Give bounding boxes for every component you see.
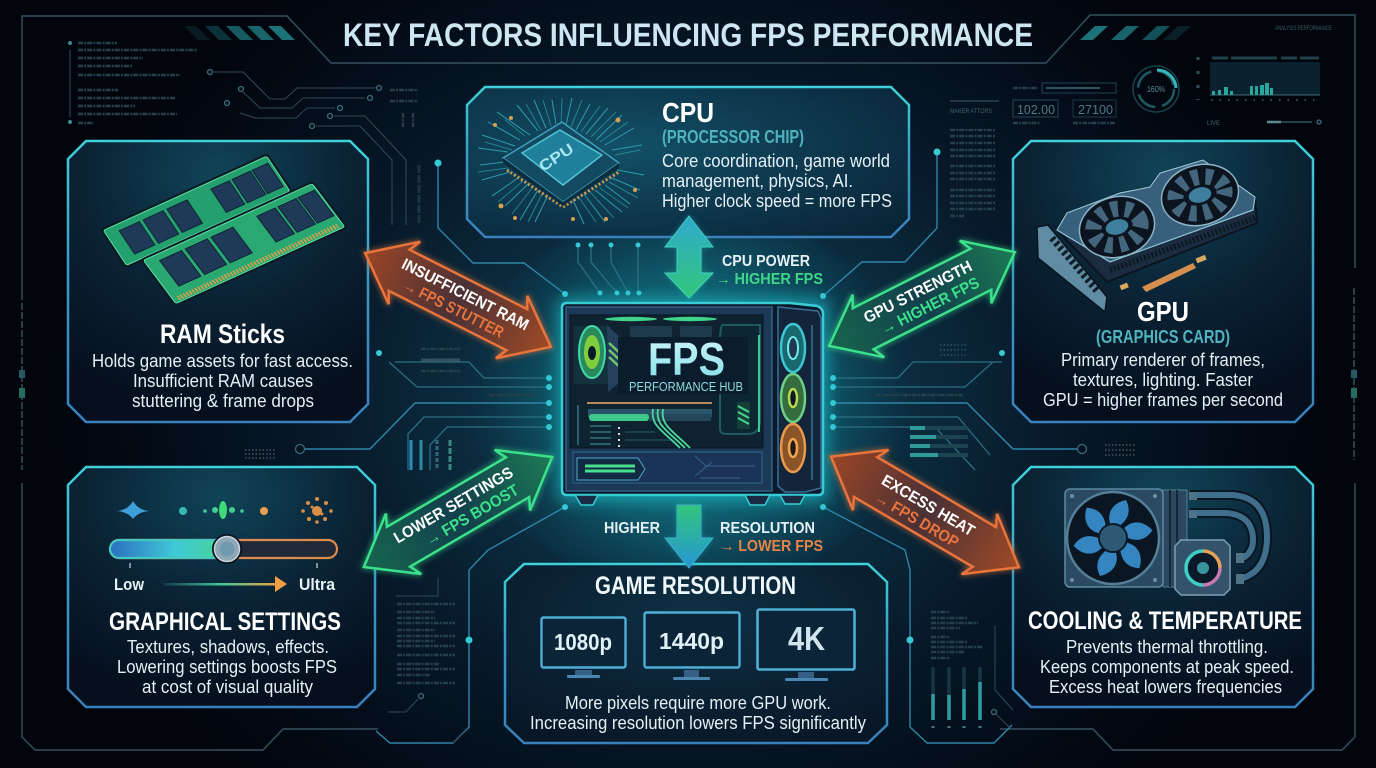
hub glow: [460, 210, 920, 590]
resolution description: More pixels require more GPU work.: [565, 693, 831, 713]
GPU description: textures, lighting. Faster: [1073, 370, 1253, 390]
arrow: GPU strength: [813, 221, 1031, 377]
cooling heading: COOLING & TEMPERATURE: [1028, 607, 1302, 635]
decorative stripes left: [184, 26, 295, 40]
monitor 1080p: [542, 618, 626, 678]
icon: CPU chip: [478, 98, 644, 224]
icon: low detail lens: [117, 501, 149, 519]
hub label backing: [618, 337, 748, 394]
GPU description: [1043, 350, 1283, 410]
panel: GPU: [1013, 141, 1313, 422]
arrow: lower settings: → FPS BOOST: [423, 482, 522, 550]
label: CPU power: CPU POWER: [722, 253, 810, 270]
data table right of CPU: [950, 101, 999, 216]
panel: cooling: [1013, 467, 1313, 707]
RAM description: Insufficient RAM causes: [133, 371, 313, 391]
arrow: lower settings: LOWER SETTINGS: [391, 464, 517, 547]
readouts top right: 102.00: [1017, 103, 1055, 117]
cooling description: [1040, 637, 1294, 697]
case feet: [575, 495, 805, 505]
CPU description: Higher clock speed = more FPS: [662, 191, 892, 211]
resolution description: [530, 693, 866, 733]
arrow: GPU strength: → HIGHER FPS: [878, 274, 983, 339]
central hub: PC case: [558, 298, 828, 505]
resolution heading: GAME RESOLUTION: [595, 572, 796, 600]
data table right of CPU: MAKER ATTORS: [950, 108, 992, 115]
data readout top left: [68, 41, 197, 124]
monitor 4K: 4K: [788, 620, 825, 657]
CPU description: Core coordination, game world: [662, 151, 890, 171]
gauge: [1133, 66, 1179, 112]
arrow: CPU to hub: [665, 216, 713, 298]
monitor 1440p: [644, 612, 740, 680]
top right caption: ANALYSIS PERFORMANCE: [1275, 26, 1332, 32]
icon: graphics card: [1037, 156, 1257, 312]
monitor 1080p: 1080p: [554, 629, 612, 655]
arrow: insufficient RAM: [349, 222, 567, 378]
label: higher resolution: → LOWER FPS: [720, 538, 823, 555]
icon: detail dots: [179, 501, 268, 519]
CPU cooler block: [607, 325, 760, 434]
monitor 4K: [758, 610, 854, 681]
icon: ultra particles: [301, 497, 333, 524]
RAM description: [92, 351, 353, 411]
arrow: GPU strength: GPU STRENGTH: [861, 258, 975, 327]
icon: RAM sticks: [102, 155, 346, 305]
graphical settings description: Textures, shadows, effects.: [127, 637, 329, 657]
circuit traces top left: [208, 70, 419, 225]
arrow: insufficient RAM: → FPS STUTTER: [400, 277, 507, 342]
PSU shroud: [573, 452, 762, 483]
quality slider: [110, 534, 337, 568]
graphical settings heading: GRAPHICAL SETTINGS: [109, 608, 341, 636]
label: higher resolution: [604, 520, 823, 555]
panel: RAM: [68, 141, 368, 422]
performance hub label: PERFORMANCE HUB: [629, 380, 743, 394]
GPU heading: GPU: [1137, 296, 1189, 327]
label: higher resolution: HIGHER: [604, 520, 660, 537]
motherboard: [578, 403, 712, 448]
GPU description: Primary renderer of frames,: [1061, 350, 1265, 370]
RGB top strips: [605, 317, 717, 321]
readouts top right: 27100: [1078, 103, 1113, 117]
cooling description: Excess heat lowers frequencies: [1049, 677, 1282, 697]
cooling description: Prevents thermal throttling.: [1066, 637, 1268, 657]
cooling description: Keeps components at peak speed.: [1040, 657, 1294, 677]
RAM description: Holds game assets for fast access.: [92, 351, 353, 371]
side window frame: [566, 307, 772, 491]
arrow: insufficient RAM: INSUFFICIENT RAM: [399, 256, 531, 334]
graphical settings description: [117, 637, 337, 697]
slider labels: [114, 575, 336, 594]
readouts top right: [1013, 83, 1116, 123]
graphical settings description: Lowering settings boosts FPS: [117, 657, 337, 677]
GPU description: GPU = higher frames per second: [1043, 390, 1283, 410]
circuit lines to hub: [296, 148, 1086, 743]
slider labels: Ultra: [299, 575, 336, 594]
arrow: excess heat: → FPS DROP: [872, 489, 962, 552]
arrow: hub to resolution: [665, 505, 713, 568]
arrow: excess heat: EXCESS HEAT: [878, 472, 978, 540]
label: higher resolution: RESOLUTION: [720, 520, 815, 537]
CPU description: management, physics, AI.: [662, 171, 853, 191]
GPU subheading: (GRAPHICS CARD): [1096, 327, 1230, 347]
mini chart: LIVE: [1207, 121, 1220, 127]
CPU subheading: (PROCESSOR CHIP): [662, 127, 804, 147]
label: CPU power: → HIGHER FPS: [716, 271, 823, 288]
icon: CPU chip: CPU: [536, 140, 577, 175]
gauge: 160%: [1147, 85, 1165, 94]
icon: liquid cooler: [1065, 489, 1267, 595]
rear fan: [574, 326, 610, 384]
bars bottom right: [931, 612, 1013, 728]
CPU heading: CPU: [662, 97, 714, 128]
table bottom left: [388, 578, 470, 743]
front panel with fans: [778, 307, 821, 492]
slider labels: Low: [114, 575, 145, 594]
small readouts around hub: [245, 345, 1135, 470]
RAM description: stuttering & frame drops: [132, 391, 314, 411]
decorative stripes right: [1080, 26, 1191, 40]
arrow: excess heat: [813, 427, 1037, 597]
monitor 1440p: 1440p: [659, 628, 724, 654]
FPS label: FPS: [648, 333, 725, 385]
CPU description: [662, 151, 892, 211]
panel: game resolution: [505, 564, 887, 743]
panel: CPU: [467, 87, 909, 237]
resolution description: Increasing resolution lowers FPS significantly: [530, 713, 866, 733]
mini chart: [1198, 57, 1321, 127]
arrow: lower settings: [346, 427, 570, 597]
graphical settings description: at cost of visual quality: [142, 677, 313, 697]
RAM heading: RAM Sticks: [160, 319, 285, 349]
label: CPU power: [716, 253, 823, 288]
panel: graphical settings: [68, 467, 375, 707]
title: KEY FACTORS INFLUENCING FPS PERFORMANCE: [343, 17, 1033, 53]
